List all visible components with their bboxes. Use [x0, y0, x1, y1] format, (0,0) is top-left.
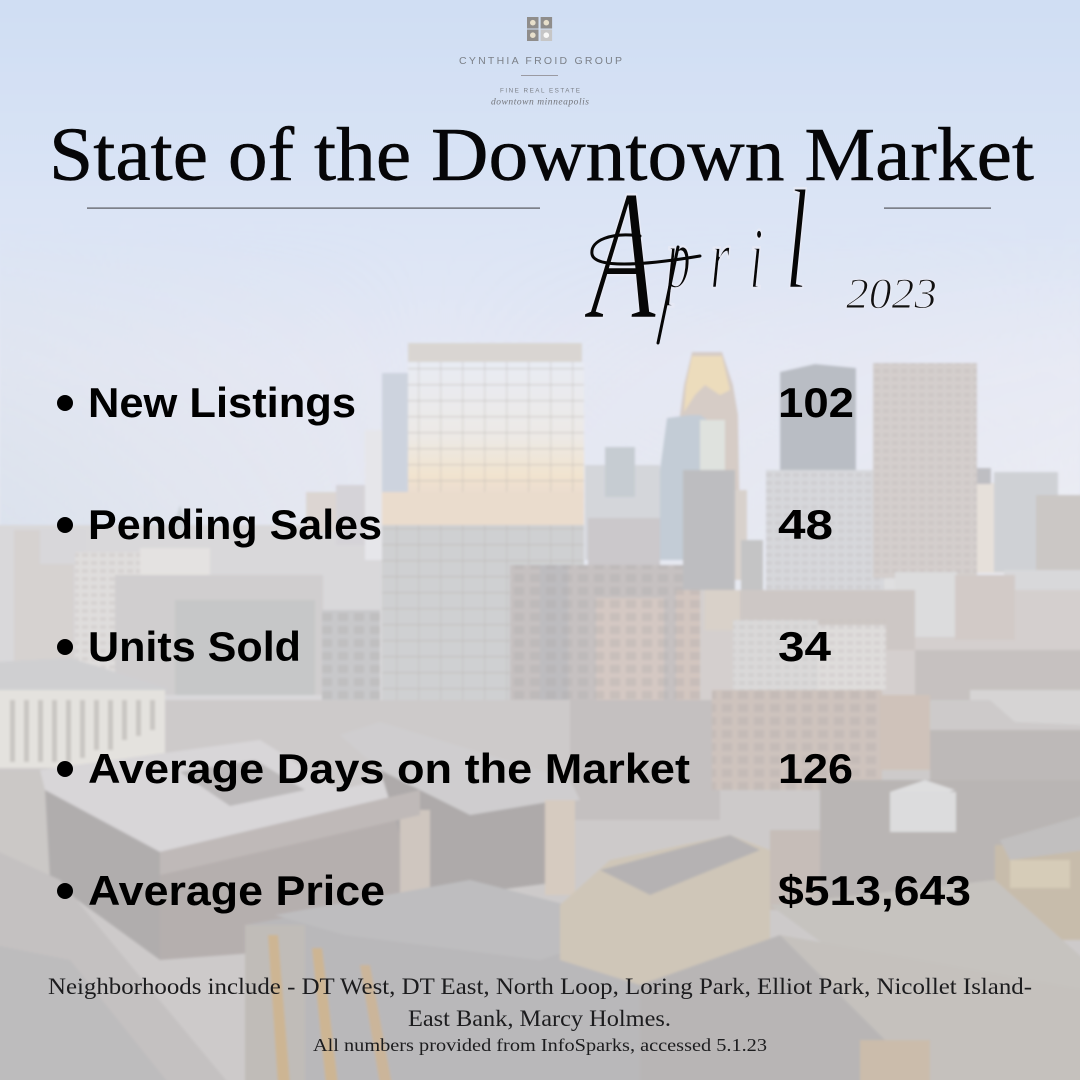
lower city base [0, 700, 1080, 1080]
row: Pending Sales: 48 [778, 501, 833, 548]
central mid-rise [585, 465, 660, 560]
road and parking lot right [770, 880, 1080, 1000]
logo: Cynthia Froid Group: downtown minneapolis [491, 98, 589, 108]
month: April: l [785, 161, 808, 320]
title: State of the Downtown Market [49, 113, 1034, 197]
row: Average Price: $513,643 [778, 867, 971, 914]
year: 2023: 2023 [846, 270, 937, 318]
mid-block buildings [570, 700, 720, 820]
row: Average Price: Average Price [88, 867, 385, 914]
row: Average Price [57, 867, 971, 914]
metrics list [57, 379, 971, 914]
logo: Cynthia Froid Group: FINE REAL ESTATE [500, 88, 580, 94]
right skyline [977, 483, 1006, 573]
title underline, right segment [884, 208, 991, 209]
footnote: neighborhoods and source [48, 974, 1032, 1055]
row: Units Sold [57, 623, 832, 670]
month: April: A [584, 153, 656, 360]
row: Average Days on the Market: Average Days on the Market [88, 745, 690, 792]
lower apartment blocks [245, 885, 640, 1080]
tan corner building [560, 835, 770, 985]
row: New Listings [57, 379, 854, 426]
street left [0, 850, 230, 1080]
row: New Listings: 102 [778, 379, 854, 426]
row: New Listings: New Listings [88, 379, 356, 426]
footnote: neighborhoods and source: Neighborhoods include - DT West, DT East, North Loop, Loring Park, Elliot Park, Nicollet Island- [48, 974, 1032, 1000]
footnote: neighborhoods and source: All numbers provided from InfoSparks, accessed 5.1.23 [313, 1035, 767, 1055]
logo: Cynthia Froid Group: CYNTHIA FROID GROUP [459, 55, 622, 67]
month: April [584, 153, 808, 360]
row: Pending Sales: Pending Sales [88, 501, 382, 548]
logo mark: four squares [527, 17, 552, 41]
main glass tower [408, 343, 582, 365]
far left horizon [0, 525, 385, 715]
row: Pending Sales [57, 501, 833, 548]
big rooftop apartment [40, 740, 420, 852]
month flourish [592, 235, 700, 343]
tall grid tower [873, 363, 977, 578]
title underline, left segment [87, 208, 540, 209]
mid band right [700, 590, 1080, 720]
white colonnade building [0, 658, 168, 700]
row: Units Sold: Units Sold [88, 623, 301, 670]
month: April: pri [662, 211, 783, 308]
logo: Cynthia Froid Group [459, 17, 622, 108]
footnote: neighborhoods and source: East Bank, Marcy Holmes. [408, 1006, 671, 1032]
row: Units Sold: 34 [778, 623, 832, 670]
crown tower [680, 352, 740, 530]
dark glass tower [780, 364, 856, 470]
white house and right buildings [820, 780, 1080, 910]
row: Average Days on the Market: 126 [778, 745, 853, 792]
